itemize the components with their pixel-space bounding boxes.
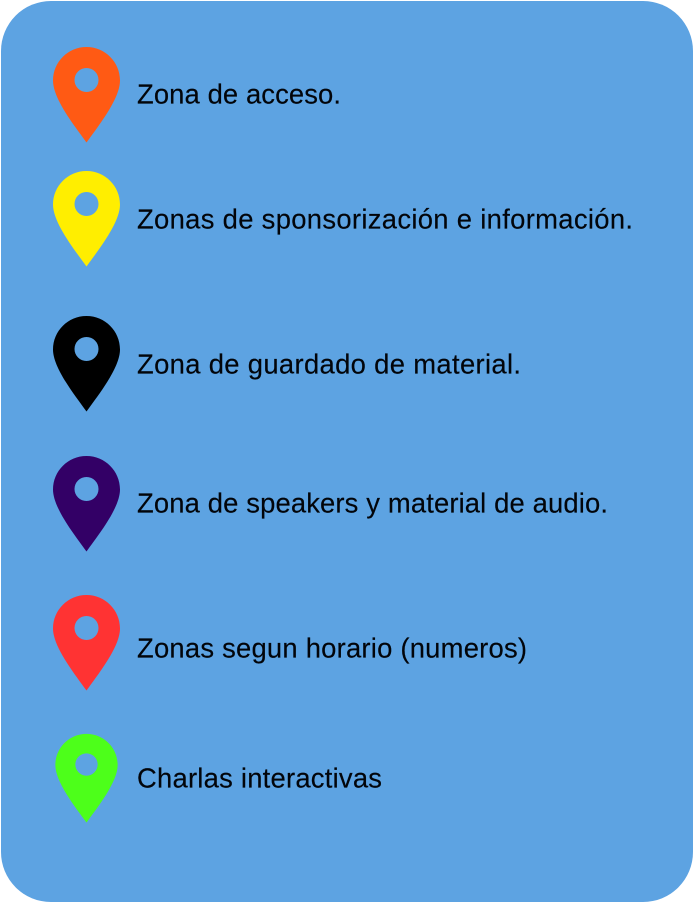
- label: horario: Zonas segun horario (numeros): [137, 632, 527, 664]
- legend item: horario: [53, 595, 527, 690]
- legend item: zona de acceso: [53, 47, 341, 142]
- icon: purple map pin: [53, 456, 120, 552]
- icon: orange map pin: [53, 47, 120, 142]
- legend item: sponsorización: [53, 171, 633, 266]
- label: speakers y audio: Zona de speakers y material de audio.: [137, 488, 608, 518]
- icon: green map pin: [55, 734, 118, 823]
- icon: yellow map pin: [53, 171, 120, 266]
- label: guardado de material: Zona de guardado de material.: [137, 348, 521, 380]
- label: sponsorización: Zonas de sponsorización e información.: [137, 204, 633, 234]
- legend item: guardado de material: [53, 316, 521, 412]
- legend item: charlas interactivas: [55, 734, 382, 823]
- legend item: speakers y audio: [53, 456, 608, 552]
- icon: black map pin: [53, 316, 120, 412]
- label: zona de acceso: Zona de acceso.: [137, 78, 341, 110]
- label: charlas interactivas: Charlas interactivas: [137, 762, 382, 794]
- icon: red map pin: [53, 595, 120, 690]
